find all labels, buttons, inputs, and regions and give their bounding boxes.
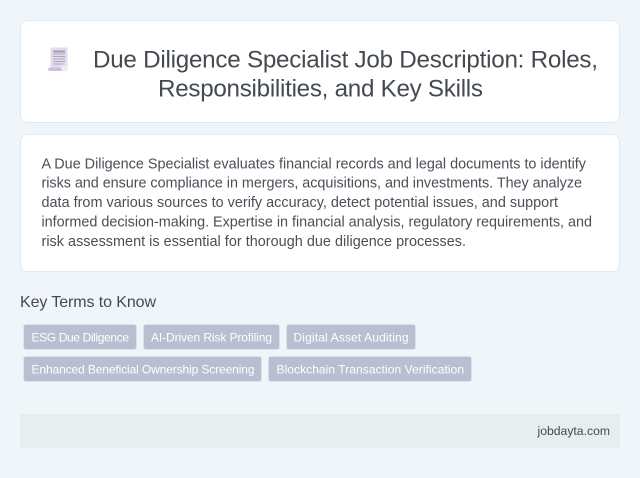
tag list: key terms	[24, 324, 472, 382]
heading: title: Due Diligence Specialist Job Description: Roles,	[93, 46, 598, 74]
text block: description paragraph	[42, 156, 592, 250]
tag: AI-Driven Risk Profiling: AI-Driven Risk Profiling	[151, 330, 272, 344]
panel: description	[20, 134, 620, 272]
tag: Digital Asset Auditing: Digital Asset Auditing	[294, 330, 408, 344]
tag: Digital Asset Auditing	[286, 324, 416, 350]
tag: Blockchain Transaction Verification	[268, 356, 472, 382]
heading: title	[93, 46, 598, 102]
text block: description paragraph: data from various sources to verify accuracy, detect potential issues, and support	[42, 195, 558, 211]
text block: description paragraph: A Due Diligence Specialist evaluates financial records and legal documents to identify	[42, 156, 587, 172]
tag: ESG Due Diligence: ESG Due Diligence	[32, 330, 129, 344]
text block: description paragraph: informed decision-making. Expertise in financial analysis, regulatory requirements, and	[42, 214, 592, 230]
footer: jobdayta.com	[536, 424, 610, 438]
tag: Enhanced Beneficial Ownership Screening: Enhanced Beneficial Ownership Screening	[32, 362, 254, 376]
heading: key terms: Key Terms to Know	[20, 294, 156, 311]
footer	[20, 414, 620, 448]
text block: description paragraph: risks and ensure compliance in mergers, acquisitions, and investments. They analyze	[42, 176, 582, 192]
panel: title card	[20, 20, 620, 122]
text block: description paragraph: risk assessment is essential for thorough due diligence processes.	[42, 234, 466, 250]
icon: document scroll	[48, 48, 68, 71]
tag: AI-Driven Risk Profiling	[144, 324, 280, 350]
heading: title: Responsibilities, and Key Skills	[158, 76, 483, 102]
tag: Enhanced Beneficial Ownership Screening	[24, 356, 262, 382]
tag: ESG Due Diligence	[24, 324, 136, 350]
tag: Blockchain Transaction Verification: Blockchain Transaction Verification	[276, 362, 464, 376]
